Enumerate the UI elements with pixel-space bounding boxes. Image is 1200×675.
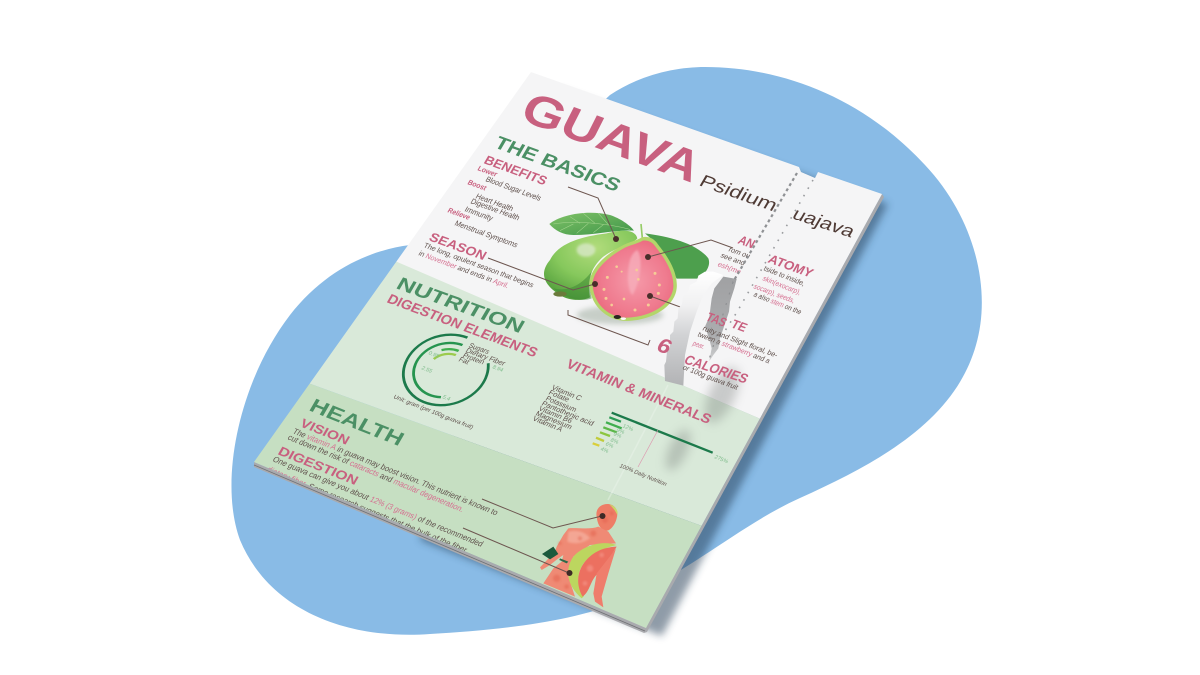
fold crease — [608, 492, 612, 500]
text block: anatomy — [716, 233, 817, 316]
text block: benefits: Menstrual Symptoms — [453, 219, 520, 249]
panel: the basics background — [396, 72, 882, 418]
text block: season: in November and ends in April. — [417, 249, 511, 290]
callout: whole fruit to benefits — [568, 187, 616, 239]
icon: guava highlight — [577, 243, 595, 257]
chart labels: vitamins — [531, 383, 596, 433]
callout: flesh to anatomy — [648, 240, 733, 257]
subtitle: Psidium: Psidium — [696, 171, 781, 215]
icon: whole guava — [544, 231, 637, 300]
chart bar values: 8% — [609, 438, 620, 446]
chart bar values: 12% — [621, 424, 634, 433]
guava infographic brochure mockup scene — [232, 67, 982, 640]
text block: anatomy: socarp), seeds, — [752, 282, 797, 305]
text block: calories — [652, 334, 752, 392]
fold shadow lower — [662, 428, 694, 472]
text block: taste: TE — [728, 317, 750, 335]
text block: digestion: dietary fiber. Some research suggests that the bulk of the fiber — [265, 464, 469, 554]
panel: health background — [254, 384, 702, 628]
strip: light front — [664, 272, 723, 386]
panel: nutrition background — [310, 262, 760, 526]
callout: eye vision line — [482, 499, 602, 528]
text block: benefits: Heart Health — [474, 192, 515, 213]
daily nutrition label: 100% Daily Nutrition — [618, 464, 668, 488]
figure: guava slice rind — [568, 543, 617, 598]
text block: calories: 6 — [652, 334, 676, 359]
chart labels: 5.4 — [441, 395, 451, 402]
chart legend: Protein — [461, 351, 487, 366]
chart labels: vitamins: Folate — [547, 388, 571, 404]
chart labels: vitamins: Pantothenic acid — [540, 399, 596, 428]
icon: back leaf left — [549, 213, 634, 235]
chart labels: vitamins: Vitamin B6 — [537, 404, 574, 425]
fruit ground shadow — [577, 306, 663, 324]
text block: anatomy: tside to inside, — [762, 264, 807, 288]
chart labels: 0.95 — [427, 351, 440, 360]
illustration: human figure with guava texture — [540, 504, 618, 607]
chart: rings — [388, 324, 504, 416]
icon: blossom end of whole guava — [553, 291, 567, 297]
heading: the basics: THE BASICS — [490, 133, 624, 196]
text block: anatomy: esh(me — [716, 260, 743, 276]
illustration: guava fruit — [544, 213, 709, 324]
chart unit note: Unit: gram (per 100g guava fruit) — [392, 395, 474, 431]
text block: benefits: Immunity — [463, 205, 495, 223]
chart bar values — [599, 424, 729, 465]
text block: taste — [691, 310, 780, 365]
heading: health: HEALTH — [305, 395, 408, 451]
blue background blob — [231, 67, 982, 635]
figure: hair highlight — [609, 504, 618, 515]
text block: calories: CALORIES — [681, 352, 752, 386]
figure: right arm — [593, 548, 616, 607]
figure: small waist band — [559, 558, 568, 563]
icon: stem — [641, 224, 643, 242]
callout: edge to season — [488, 258, 595, 290]
chart labels: vitamins: Potassium — [544, 394, 579, 414]
callout dots — [592, 236, 653, 299]
icon: whole guava shadow — [553, 272, 592, 300]
text block: anatomy: rom ou — [727, 245, 752, 260]
curled tear strip — [664, 272, 737, 386]
chart labels: vitamins: Magnesium — [534, 409, 574, 431]
subtitle: guajava remainder: uajava — [789, 204, 859, 241]
text block: vision: The vitamin A in guava may boost vision. This nutrient is known to — [291, 426, 501, 517]
text block: anatomy: see and — [719, 251, 747, 267]
figure: chest highlights — [567, 531, 590, 543]
chart labels: vitamins: Vitamin C — [550, 383, 584, 403]
strip: dark back — [705, 277, 737, 361]
text block: anatomy: ATOMY — [765, 252, 817, 280]
text block: digestion: DIGESTION — [275, 444, 361, 488]
torn strip perforation dots — [716, 180, 813, 345]
torn strip perforation dashes — [733, 173, 797, 282]
chart: digestion radial rings — [388, 324, 508, 431]
text block: benefits: Blood Sugar Levels — [484, 175, 543, 203]
chart legend — [457, 341, 508, 368]
text block: taste: tween a strawberry and a — [696, 330, 773, 365]
heading: digestion elements: DIGESTION ELEMENTS — [384, 291, 541, 360]
chart labels — [420, 351, 504, 402]
title: GUAVA: GUAVA — [513, 82, 710, 192]
text block: anatomy: a also stem on the — [752, 290, 803, 316]
icon: halved guava rind — [589, 237, 677, 321]
chart bar values: 6% — [604, 442, 615, 450]
text block: anatomy: skin(exocarp), — [761, 274, 803, 297]
figure: head — [596, 504, 617, 531]
heading: nutrition: NUTRITION — [392, 274, 528, 338]
heading: vitamin and minerals: VITAMIN & MINERALS — [563, 356, 715, 427]
chart bar values: 9% — [615, 428, 626, 436]
icon: fruit blossom end — [614, 315, 626, 320]
text block: digestion: One guava can give you about 12% (3 grams) of the recommended — [271, 454, 486, 549]
chart bar values: 9% — [612, 432, 623, 440]
chart bar values: 275% — [713, 455, 729, 465]
text block: calories: or 100g guava fruit — [681, 363, 741, 392]
figure: guava slice flesh — [578, 547, 617, 597]
brochure drop shadow — [420, 90, 888, 636]
callout: stomach digestion line — [463, 528, 569, 573]
text block: taste: TAS — [703, 310, 730, 329]
text block: benefits: BENEFITS — [481, 153, 550, 188]
brochure page — [254, 72, 882, 628]
text block: benefits: Relieve — [446, 206, 472, 222]
chart labels: 2.55 — [420, 366, 433, 375]
text block: benefits: Digestive Health — [469, 197, 521, 222]
figure: mottled slice — [583, 553, 604, 586]
callout: seed to taste — [652, 296, 680, 308]
text block: taste: ruity and Slight floral, be- — [701, 324, 780, 360]
chart: vitamin bars — [531, 383, 729, 488]
fold shadow upper — [701, 364, 744, 426]
text block: benefits — [446, 153, 550, 249]
icon: guava centre — [628, 250, 641, 295]
chart legend: Dietary Fiber — [464, 346, 508, 368]
chart legend: Fat — [457, 355, 472, 366]
figure: mottled skin — [553, 511, 614, 589]
callout: calories bracket — [568, 310, 650, 345]
text block: season: The long, opulent season that begins — [422, 241, 536, 289]
icon: halved guava flesh — [593, 241, 673, 318]
icon: seeds — [602, 265, 661, 311]
callout dots on figure — [566, 513, 606, 576]
chart labels: vitamins: Vitamin A — [531, 414, 565, 433]
chart bar values: 4% — [599, 447, 610, 455]
icon: back leaf right — [645, 233, 709, 279]
icon: leaf veins — [553, 213, 630, 233]
figure: dark arm band — [542, 547, 558, 559]
text block: vision: cut down the risk of cataracts and macular degeneration. — [286, 432, 466, 514]
torn strip lower marks — [708, 282, 733, 363]
brochure spine and page thickness — [254, 194, 884, 633]
chart labels: 8.94 — [491, 365, 504, 374]
text block: benefits: Boost — [466, 178, 489, 192]
chart bars — [593, 413, 713, 453]
daily nutrition marker — [638, 430, 658, 467]
text block: season: SEASON — [426, 230, 489, 263]
text block: anatomy: AN — [735, 233, 758, 251]
figure: torso, left arm and hips — [540, 527, 616, 597]
text block: taste: pear. — [691, 339, 707, 351]
callout lines and dots on the fruit — [488, 187, 733, 345]
text block: vision: VISION — [297, 416, 352, 447]
chart legend: Sugars — [467, 341, 492, 356]
text block: benefits: Lower — [476, 164, 499, 179]
